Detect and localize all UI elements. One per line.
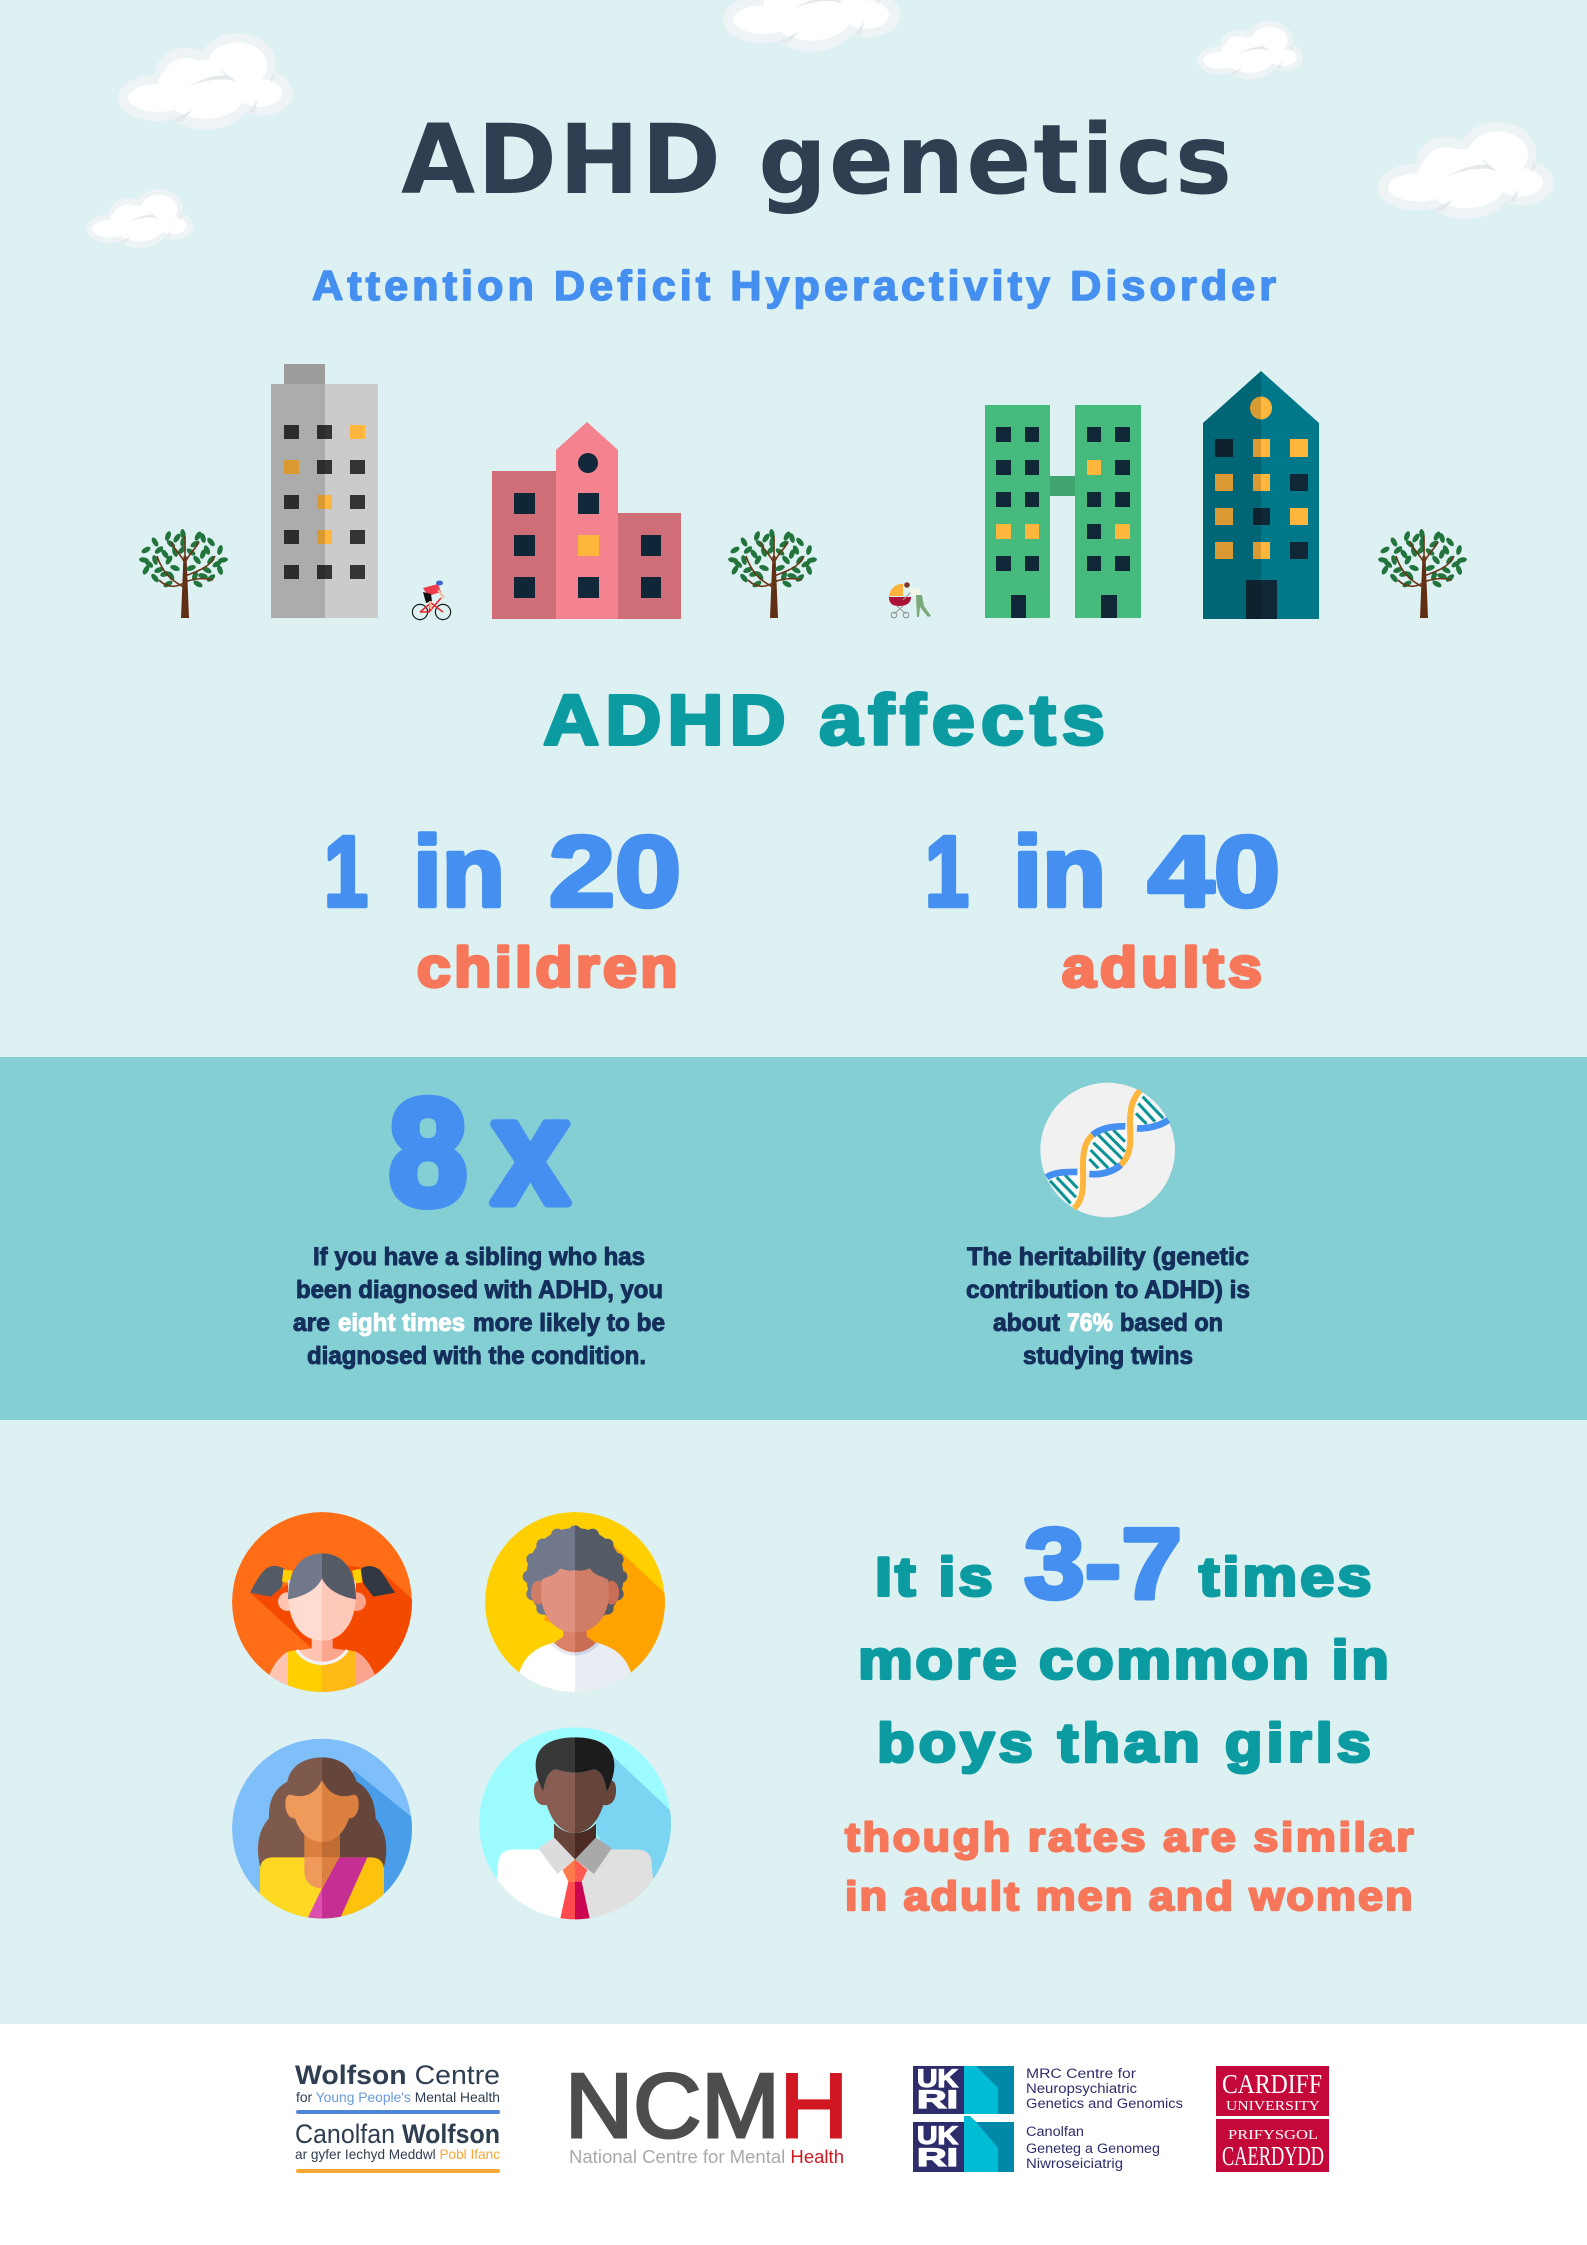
cloud: top left xyxy=(118,33,293,130)
text: sibling risk xyxy=(293,1243,665,1370)
subtitle: Attention Deficit Hyperactivity Disorder xyxy=(312,263,1276,310)
stat: 8x xyxy=(389,1067,569,1236)
stat: 1 in 40 adults: 40 xyxy=(1148,816,1280,928)
stat: 1 in 40 adults: in xyxy=(1013,816,1106,928)
cloud: top right small xyxy=(1197,21,1303,80)
text: 3-7 times more common in boys: more common in xyxy=(858,1630,1389,1691)
text: sibling risk: are xyxy=(293,1309,330,1337)
logo: UKRI MRC Centre: Geneteg a Genomeg xyxy=(1026,2141,1160,2156)
stat: 1 in 40 adults: adults xyxy=(1062,937,1262,999)
tree left xyxy=(139,529,228,618)
panel: footer xyxy=(0,2024,1587,2245)
stat: 8x: 8 xyxy=(389,1068,467,1236)
logo: NCMH: National Centre for Mental Health xyxy=(569,2147,844,2167)
logo: Wolfson Centre xyxy=(295,2060,500,2173)
text: sibling risk: more likely to be xyxy=(473,1309,665,1337)
text: heritability: studying twins xyxy=(1023,1342,1193,1370)
logo: UKRI MRC Centre: Canolfan xyxy=(1026,2124,1084,2139)
avatars xyxy=(232,1512,673,1923)
text: heritability: contribution to ADHD) is xyxy=(966,1276,1250,1304)
stat: 8x: x xyxy=(492,1067,569,1235)
cloud: top centre xyxy=(723,0,900,52)
building: green twin towers xyxy=(985,405,1141,618)
text: 3-7 times more common in boys: boys than girls xyxy=(877,1713,1371,1774)
avatar: girl with pigtails xyxy=(232,1512,417,1697)
logo: Cardiff University: UNIVERSITY xyxy=(1226,2099,1320,2114)
text: similar rates in adults: in adult men and women xyxy=(845,1874,1413,1920)
building: pink house xyxy=(492,422,681,619)
logo: UKRI MRC Centre: RI xyxy=(917,2086,958,2114)
logo: UKRI MRC Centre: RI xyxy=(917,2144,958,2172)
stat: 1 in 20 children: children xyxy=(417,937,677,999)
tree centre xyxy=(728,529,817,618)
logo: UKRI MRC Centre: UK xyxy=(917,2122,958,2150)
logo: Cardiff University: CAERDYDD xyxy=(1222,2141,1324,2171)
logo: Cardiff University xyxy=(1216,2066,1329,2172)
avatar: curly-haired person xyxy=(485,1512,673,1695)
text: similar rates in adults xyxy=(845,1815,1414,1920)
icon: cyclist xyxy=(412,580,451,620)
stat: 1 in 40 adults xyxy=(925,816,1280,999)
building: teal gabled house xyxy=(1203,371,1319,619)
text: sibling risk: diagnosed with the condition. xyxy=(307,1342,646,1370)
stat: 1 in 20 children: 1 xyxy=(324,816,368,928)
logo: Wolfson Centre: Wolfson Centre xyxy=(295,2060,500,2090)
logo: Wolfson Centre: for Young People's Mental Health xyxy=(296,2089,500,2105)
text: sibling risk: been diagnosed with ADHD, you xyxy=(296,1276,663,1304)
text: similar rates in adults: though rates are similar xyxy=(845,1815,1414,1861)
logo: UKRI MRC Centre xyxy=(913,2065,1183,2172)
stat: 1 in 20 children: 20 xyxy=(549,816,681,928)
logo: UKRI MRC Centre: Neuropsychiatric xyxy=(1026,2081,1137,2096)
avatar: man with tie xyxy=(479,1727,673,1923)
cloud: small left xyxy=(86,189,193,248)
icon: parent with stroller xyxy=(889,582,931,618)
text: sibling risk: If you have a sibling who has xyxy=(313,1243,645,1271)
title: ADHD genetics xyxy=(401,104,1232,216)
logo: Cardiff University: CARDIFF xyxy=(1222,2069,1322,2099)
text: heritability: based on xyxy=(1120,1309,1223,1337)
logo: Wolfson Centre: Canolfan Wolfson xyxy=(295,2119,500,2149)
logo: NCMH: NCMH xyxy=(565,2056,848,2157)
logo: Wolfson Centre: ar gyfer Iechyd Meddwl Pobl Ifanc xyxy=(295,2146,500,2162)
text: heritability: about xyxy=(993,1309,1061,1337)
logo: UKRI MRC Centre: UK xyxy=(917,2065,958,2093)
stat: 1 in 40 adults: 1 xyxy=(925,816,969,928)
icon: DNA helix xyxy=(1040,1083,1175,1217)
building: grey tower xyxy=(271,364,378,618)
stat: 1 in 20 children xyxy=(324,816,681,999)
logo: UKRI MRC Centre: MRC Centre for xyxy=(1026,2066,1137,2081)
text: heritability: The heritability (genetic xyxy=(967,1243,1249,1271)
text: 3-7 times more common in boys: times xyxy=(1199,1547,1371,1608)
heading: ADHD affects: ADHD affects xyxy=(543,680,1105,760)
stat: 1 in 20 children: in xyxy=(413,816,505,928)
avatar: woman with sash xyxy=(232,1739,413,1923)
text: heritability xyxy=(966,1243,1250,1370)
panel: sibling and heritability band xyxy=(0,1057,1587,1420)
text: 3-7 times more common in boys xyxy=(858,1508,1389,1774)
logo: UKRI MRC Centre: Genetics and Genomics xyxy=(1026,2096,1183,2111)
text: heritability: 76% xyxy=(1067,1309,1113,1337)
text: 3-7 times more common in boys: 3-7 xyxy=(1024,1508,1182,1620)
logo: Cardiff University: PRIFYSGOL xyxy=(1228,2128,1318,2143)
logo: UKRI MRC Centre: Niwroseiciatrig xyxy=(1026,2156,1123,2171)
text: sibling risk: eight times xyxy=(338,1309,465,1337)
text: 3-7 times more common in boys: It is xyxy=(875,1547,993,1608)
tree right xyxy=(1378,529,1467,618)
cloud: right xyxy=(1378,122,1554,219)
